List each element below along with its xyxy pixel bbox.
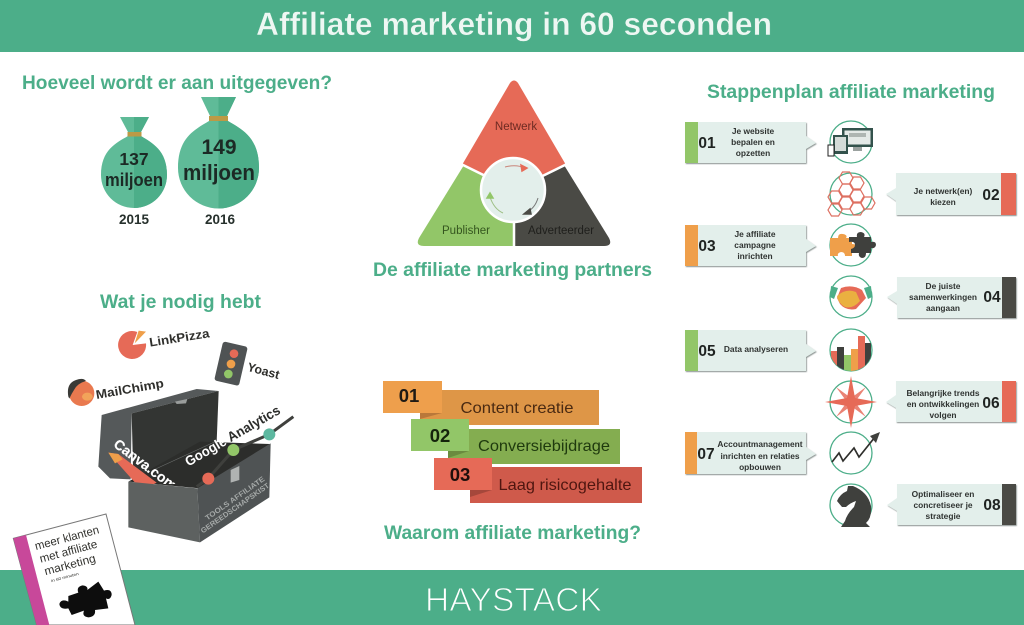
panel: tools <box>13 291 293 625</box>
step 05 callout: Data analyseren <box>724 344 788 354</box>
money bag 2015 <box>101 117 167 227</box>
step 02 callout: Je netwerk(en) <box>914 186 973 196</box>
book cover: marketing <box>43 552 97 578</box>
logo wordmark: HAYSTACK <box>425 582 602 619</box>
segment: Publisher <box>418 165 514 246</box>
tool: Yoast <box>214 341 281 386</box>
box interior <box>128 442 270 488</box>
lid inside <box>132 391 219 480</box>
step 07 callout <box>685 432 816 474</box>
money bag 2016 <box>178 97 259 227</box>
header banner <box>0 0 1024 52</box>
step 08 callout: concretiseer je <box>913 500 973 510</box>
reason 03: Laag risicogehalte <box>498 477 632 494</box>
title: Affiliate marketing in 60 seconden <box>256 6 772 42</box>
step 07 callout: inrichten en relaties <box>720 451 800 461</box>
step 02 callout: 02 <box>982 187 1000 204</box>
heading: step plan: Stappenplan affiliate marketing <box>707 81 995 103</box>
panel: why affiliate marketing <box>383 381 642 544</box>
panel: step plan <box>685 81 1016 527</box>
step 08 callout: 08 <box>983 497 1001 514</box>
step 02 callout <box>886 173 1016 215</box>
triangle diagram: Netwerk <box>495 121 537 133</box>
step 03 icon: puzzle <box>830 224 876 266</box>
book cover <box>13 514 135 625</box>
step 01 icon: devices <box>828 121 873 163</box>
step 07 callout: 07 <box>697 446 715 463</box>
reason 03: 03 <box>450 464 470 485</box>
tool: LinkPizza: LinkPizza <box>148 326 211 350</box>
label: Canva.com: Canva.com <box>111 436 180 493</box>
step 06 callout: Belangrijke trends <box>906 388 980 398</box>
box front <box>128 482 200 542</box>
money bag 2016: miljoen <box>183 160 255 185</box>
step 03 callout <box>685 225 816 266</box>
tool: MailChimp <box>68 376 165 406</box>
step 04 icon: handshake <box>830 276 872 318</box>
book cover: met affiliate <box>38 538 99 566</box>
step 07 icon: growth arrow <box>830 432 880 474</box>
book cover: in 60 minuten <box>50 571 79 583</box>
step 06 callout: en ontwikkelingen <box>907 399 979 409</box>
step 01 callout <box>685 122 816 163</box>
reason 02: 02 <box>430 425 450 446</box>
tool: LinkPizza <box>118 326 211 359</box>
step 07 callout: Accountmanagement <box>717 439 803 449</box>
money bag 2016: 149 <box>201 136 237 159</box>
step 03 callout: 03 <box>698 238 716 255</box>
segment: Adverteerder <box>514 165 610 246</box>
step 08 callout: Optimaliseer en <box>912 489 974 499</box>
icon: pencil <box>108 452 157 484</box>
step 04 callout: aangaan <box>926 303 960 313</box>
step 01 callout: Je website <box>732 126 775 136</box>
step 02 icon: network hexagons <box>828 172 875 216</box>
tool: MailChimp: MailChimp <box>95 376 165 402</box>
box label: TOOLS AFFILIATE <box>203 474 266 522</box>
reason 03 <box>434 458 642 503</box>
step 08 callout: strategie <box>926 511 961 521</box>
reason 01: Content creatie <box>460 400 574 417</box>
triangle diagram: Adverteerder <box>528 225 594 237</box>
panel: partners <box>373 80 652 281</box>
heading: spending: Hoeveel wordt er aan uitgegeven? <box>22 72 332 94</box>
step 05 icon: bar chart <box>830 329 872 376</box>
reason 01 <box>383 381 599 425</box>
step 03 callout: Je affiliate <box>735 229 776 239</box>
reason 02 <box>411 419 620 464</box>
step 04 callout <box>887 277 1016 318</box>
step 06 callout: 06 <box>982 395 1000 412</box>
step 04 callout: 04 <box>983 289 1001 306</box>
step 07 callout: opbouwen <box>739 462 781 472</box>
triangle diagram <box>418 80 610 247</box>
step 01 callout: opzetten <box>736 148 770 158</box>
reason 01: 01 <box>399 385 419 406</box>
step 02 callout: kiezen <box>930 197 956 207</box>
money bag 2016: 2016 <box>205 212 236 227</box>
step 03 callout: campagne <box>734 240 776 250</box>
step 03 callout: inrichten <box>737 251 773 261</box>
money bag 2015: 137 <box>119 149 149 169</box>
tool: Yoast: Yoast <box>246 360 281 382</box>
step 04 callout: De juiste <box>926 281 961 291</box>
panel: spending <box>22 72 332 227</box>
step 04 callout: samenwerkingen <box>909 292 977 302</box>
centre cycle <box>481 158 545 222</box>
triangle diagram: Publisher <box>442 225 490 237</box>
step 06 callout <box>886 381 1016 422</box>
heading: partners: De affiliate marketing partners <box>373 259 652 281</box>
money bag 2015: 2015 <box>119 212 150 227</box>
heading: why: Waarom affiliate marketing? <box>384 522 641 544</box>
reason 02: Conversiebijdrage <box>478 438 610 455</box>
step 01 callout: 01 <box>698 135 716 152</box>
money bag 2015: miljoen <box>105 170 163 190</box>
box label: GEREEDSCHAPSKIST <box>199 481 271 535</box>
step 08 icon: chess knight <box>830 484 872 527</box>
step 05 callout: 05 <box>698 343 716 360</box>
google analytics line <box>197 417 293 487</box>
book cover: meer klanten <box>33 523 101 553</box>
box side <box>197 443 271 542</box>
segment: Netwerk <box>462 80 566 190</box>
lid outside <box>98 389 219 479</box>
footer banner <box>0 570 1024 625</box>
heading: tools: Wat je nodig hebt <box>100 291 261 313</box>
label: Google Analytics: Google Analytics <box>182 402 283 469</box>
toolbox illustration <box>13 326 293 625</box>
step 01 callout: bepalen en <box>731 137 775 147</box>
icon: puzzle piece <box>59 582 112 617</box>
step 06 icon: compass rose <box>825 376 877 428</box>
step 05 callout <box>685 330 816 371</box>
step 06 callout: volgen <box>930 410 956 420</box>
step 08 callout <box>887 484 1016 525</box>
